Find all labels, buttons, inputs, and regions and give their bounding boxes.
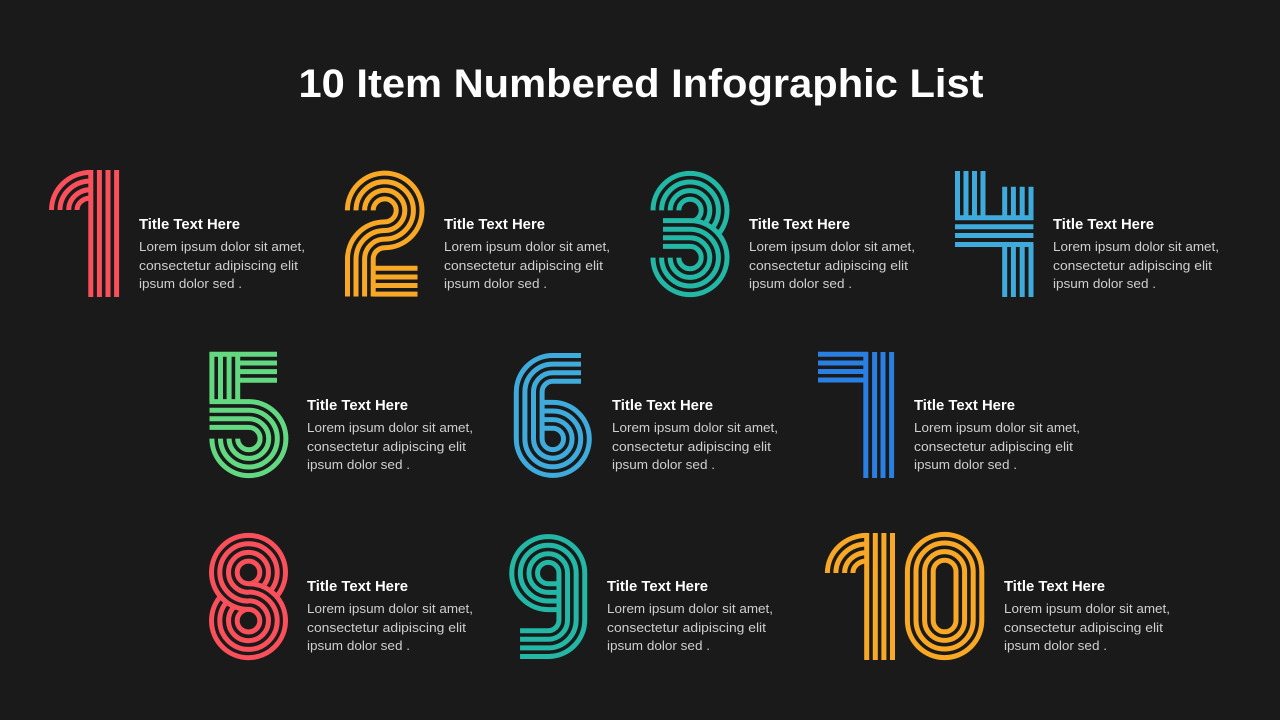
text: item 6: ipsum dolor sed . [612,457,715,472]
text: item 7: consectetur adipiscing elit [914,439,1073,454]
text: item 2: ipsum dolor sed . [444,276,547,291]
item 9 [512,537,773,656]
text: item 10: Title Text Here [1004,579,1105,595]
text: item 4: Lorem ipsum dolor sit amet, [1053,239,1219,254]
text: item 6: consectetur adipiscing elit [612,439,771,454]
text: item 8 [307,579,473,653]
text: item 7: Title Text Here [914,398,1015,414]
title: 10 Item Numbered Infographic List [298,62,984,106]
text: item 2: Title Text Here [444,217,545,233]
text: item 10: ipsum dolor sed . [1004,638,1107,653]
text: item 6: Lorem ipsum dolor sit amet, [612,420,778,435]
text: item 9 [607,579,773,653]
text: item 4: Title Text Here [1053,217,1154,233]
text: item 7: Lorem ipsum dolor sit amet, [914,420,1080,435]
item 2 [347,173,610,296]
item 6 [516,356,778,475]
icon: number 5 [210,352,286,476]
text: item 10: Lorem ipsum dolor sit amet, [1004,601,1170,616]
text: item 7: ipsum dolor sed . [914,457,1017,472]
text: item 6: Title Text Here [612,398,713,414]
item 7 [818,352,1080,478]
item 1 [52,170,305,297]
text: item 8: Title Text Here [307,579,408,595]
text: item 9: ipsum dolor sed . [607,638,710,653]
text: item 1: Title Text Here [139,217,240,233]
text: item 5: ipsum dolor sed . [307,457,410,472]
text: item 5: Lorem ipsum dolor sit amet, [307,420,473,435]
text: item 3: Title Text Here [749,217,850,233]
text: item 4: ipsum dolor sed . [1053,276,1156,291]
item 3 [653,173,915,297]
text: item 3: ipsum dolor sed . [749,276,852,291]
text: item 5: Title Text Here [307,398,408,414]
text: item 1 [139,217,305,291]
text: item 1: Lorem ipsum dolor sit amet, [139,239,305,254]
icon: number 9 [512,537,585,656]
text: item 3: consectetur adipiscing elit [749,258,908,273]
icon: number 8 [209,533,288,660]
text: item 4 [1053,217,1219,291]
text: item 3: Lorem ipsum dolor sit amet, [749,239,915,254]
text: item 5: consectetur adipiscing elit [307,439,466,454]
text: item 2 [444,217,610,291]
text: item 8: Lorem ipsum dolor sit amet, [307,601,473,616]
text: item 9: consectetur adipiscing elit [607,620,766,635]
icon: number 3 [653,173,729,297]
text: item 1: consectetur adipiscing elit [139,258,298,273]
item 8 [209,533,473,660]
item 10 [827,533,1170,660]
text: item 6 [612,398,778,472]
icon: number 7 [818,352,892,478]
text: item 1: ipsum dolor sed . [139,276,242,291]
text: item 9: Lorem ipsum dolor sit amet, [607,601,773,616]
text: item 7 [914,398,1080,472]
text: item 8: consectetur adipiscing elit [307,620,466,635]
text: item 10 [1004,579,1170,653]
text: item 10: consectetur adipiscing elit [1004,620,1163,635]
icon: number 2 [347,173,422,296]
text: item 8: ipsum dolor sed . [307,638,410,653]
text: item 5 [307,398,473,472]
icon: number 1 [52,170,117,297]
text: item 2: Lorem ipsum dolor sit amet, [444,239,610,254]
text: item 2: consectetur adipiscing elit [444,258,603,273]
item 5 [210,352,473,476]
text: item 3 [749,217,915,291]
icon: number 10 [827,533,982,660]
text: item 4: consectetur adipiscing elit [1053,258,1212,273]
icon: number 6 [516,356,589,475]
item 4 [955,171,1219,297]
text: item 9: Title Text Here [607,579,708,595]
icon: number 4 [955,171,1033,297]
